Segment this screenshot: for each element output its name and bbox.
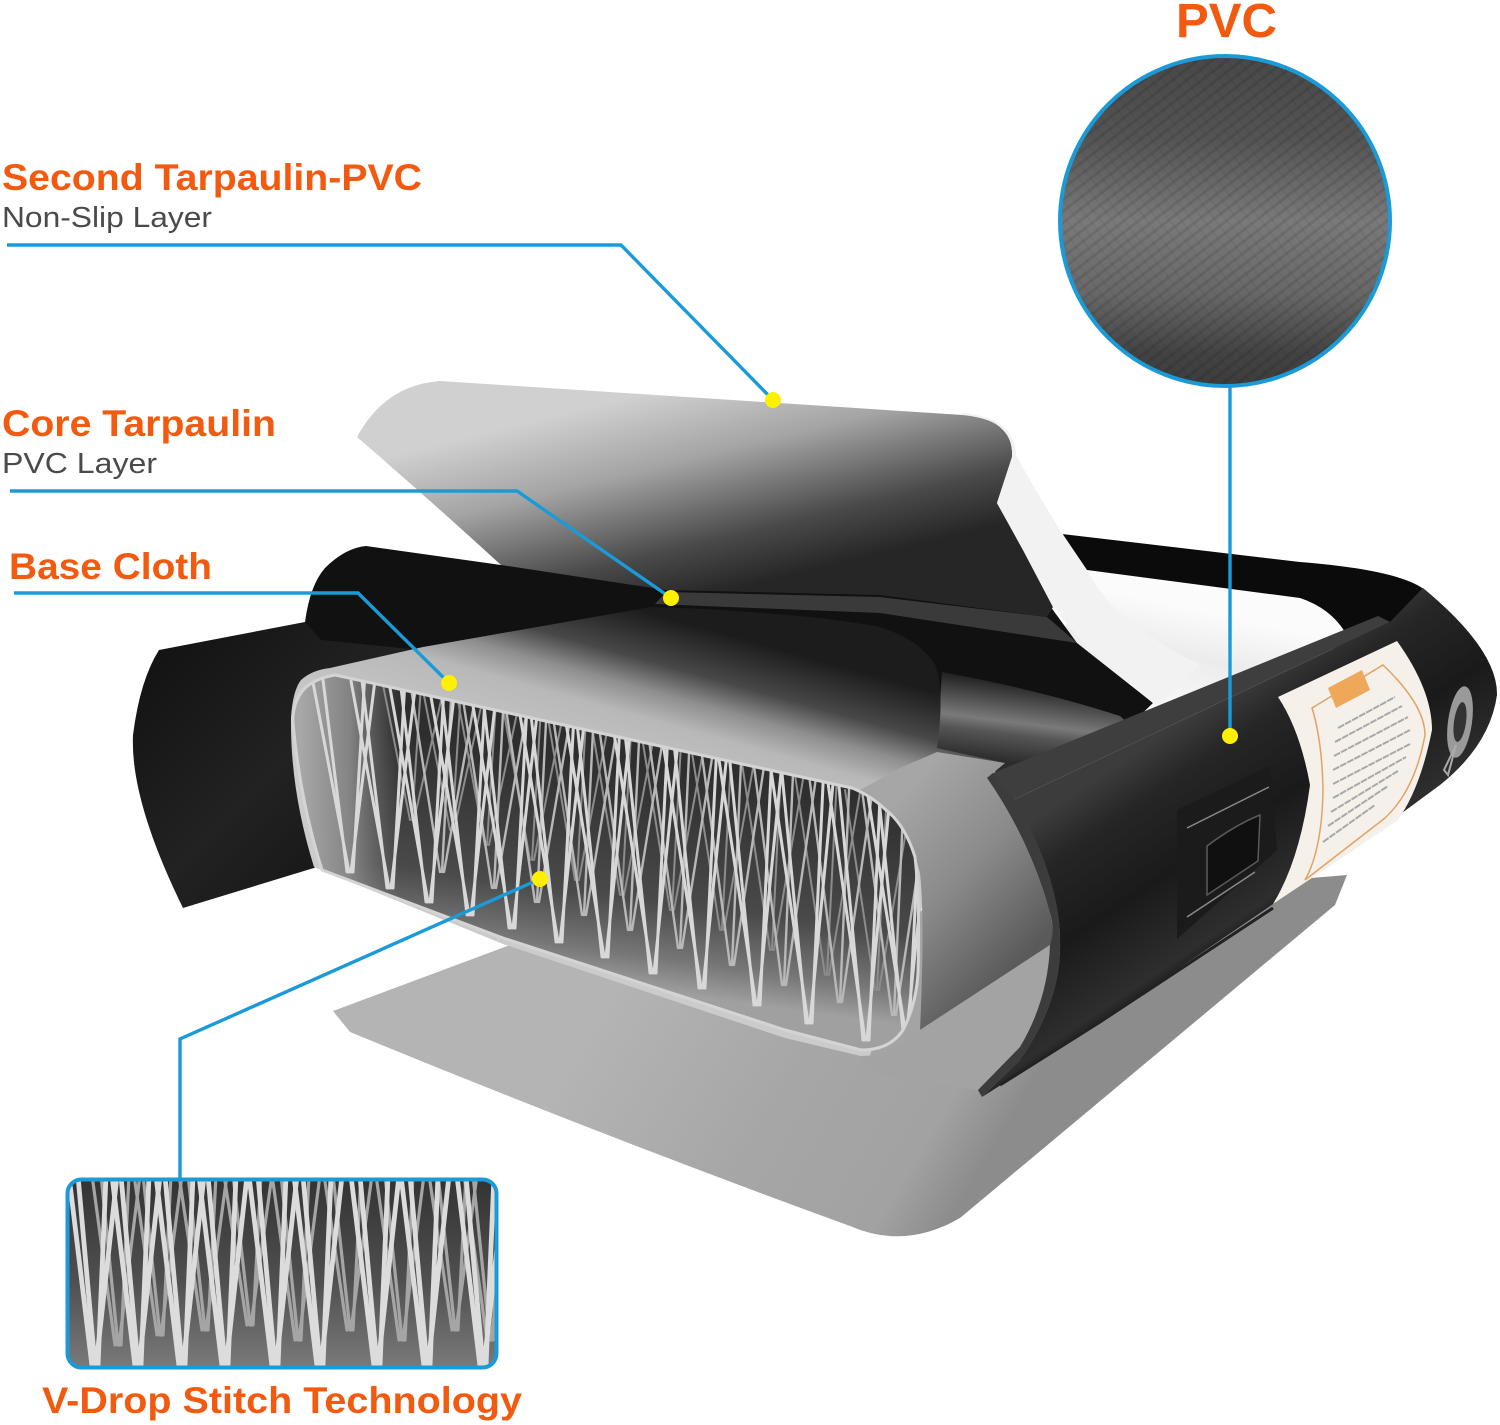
- valve emblem: [1443, 685, 1477, 775]
- label: Core Tarpaulin: [2, 403, 276, 480]
- foam tube body: [291, 607, 1005, 1058]
- gray band under sheet: [655, 592, 1077, 643]
- leader line: Second Tarpaulin: [7, 245, 773, 400]
- tube cavity: [285, 665, 932, 1060]
- middle stitch threads: [410, 682, 930, 1015]
- leader line: PVC: [1228, 385, 1232, 736]
- foam tube lower facet: [860, 945, 1050, 1090]
- white underside of sheet: [963, 413, 1200, 705]
- leader line: Base Cloth: [14, 593, 449, 683]
- hull rim strip: [987, 616, 1390, 800]
- foam tube right side: [860, 752, 1052, 1030]
- label: Core Tarpaulin: Core Tarpaulin: [2, 403, 276, 444]
- label: Core Tarpaulin: PVC Layer: [2, 448, 157, 480]
- bottom sheet: [333, 875, 1347, 1236]
- top tarpaulin sheet: [357, 381, 1053, 617]
- leader line: V-Drop Stitch: [180, 879, 540, 1179]
- white foam interior: [1060, 570, 1345, 708]
- board cross-section illustration: [133, 381, 1497, 1236]
- label: Second Tarpaulin-PVC: [2, 157, 422, 234]
- inset: V-drop stitch close-up: [67, 1175, 512, 1368]
- dark floor inside hull: [937, 672, 1130, 775]
- cylinder end arc: [978, 773, 1060, 1097]
- cylinder lower lip: [1000, 908, 1273, 1085]
- dark top shell: [305, 540, 1153, 775]
- safety label: [1273, 641, 1432, 904]
- back rim of hull: [1062, 534, 1425, 680]
- label: Second Tarpaulin-PVC: Second Tarpaulin-PVC: [2, 157, 422, 198]
- marker dots: [441, 392, 1238, 887]
- front stitch threads: [311, 672, 932, 1040]
- left black flap: [133, 622, 423, 908]
- tube rim highlight: [293, 675, 919, 1050]
- label: V-Drop Stitch Technology: V-Drop Stitch Technology: [42, 1380, 522, 1421]
- PVC material circle: [1060, 56, 1390, 386]
- back stitch threads: [380, 670, 913, 990]
- leader line: Core Tarpaulin: [10, 491, 671, 598]
- label: Second Tarpaulin-PVC: Non-Slip Layer: [2, 202, 212, 234]
- carry handle patch: [1177, 766, 1277, 939]
- label: Base Cloth: Base Cloth: [9, 546, 212, 587]
- right hull cylinder: [982, 588, 1497, 1097]
